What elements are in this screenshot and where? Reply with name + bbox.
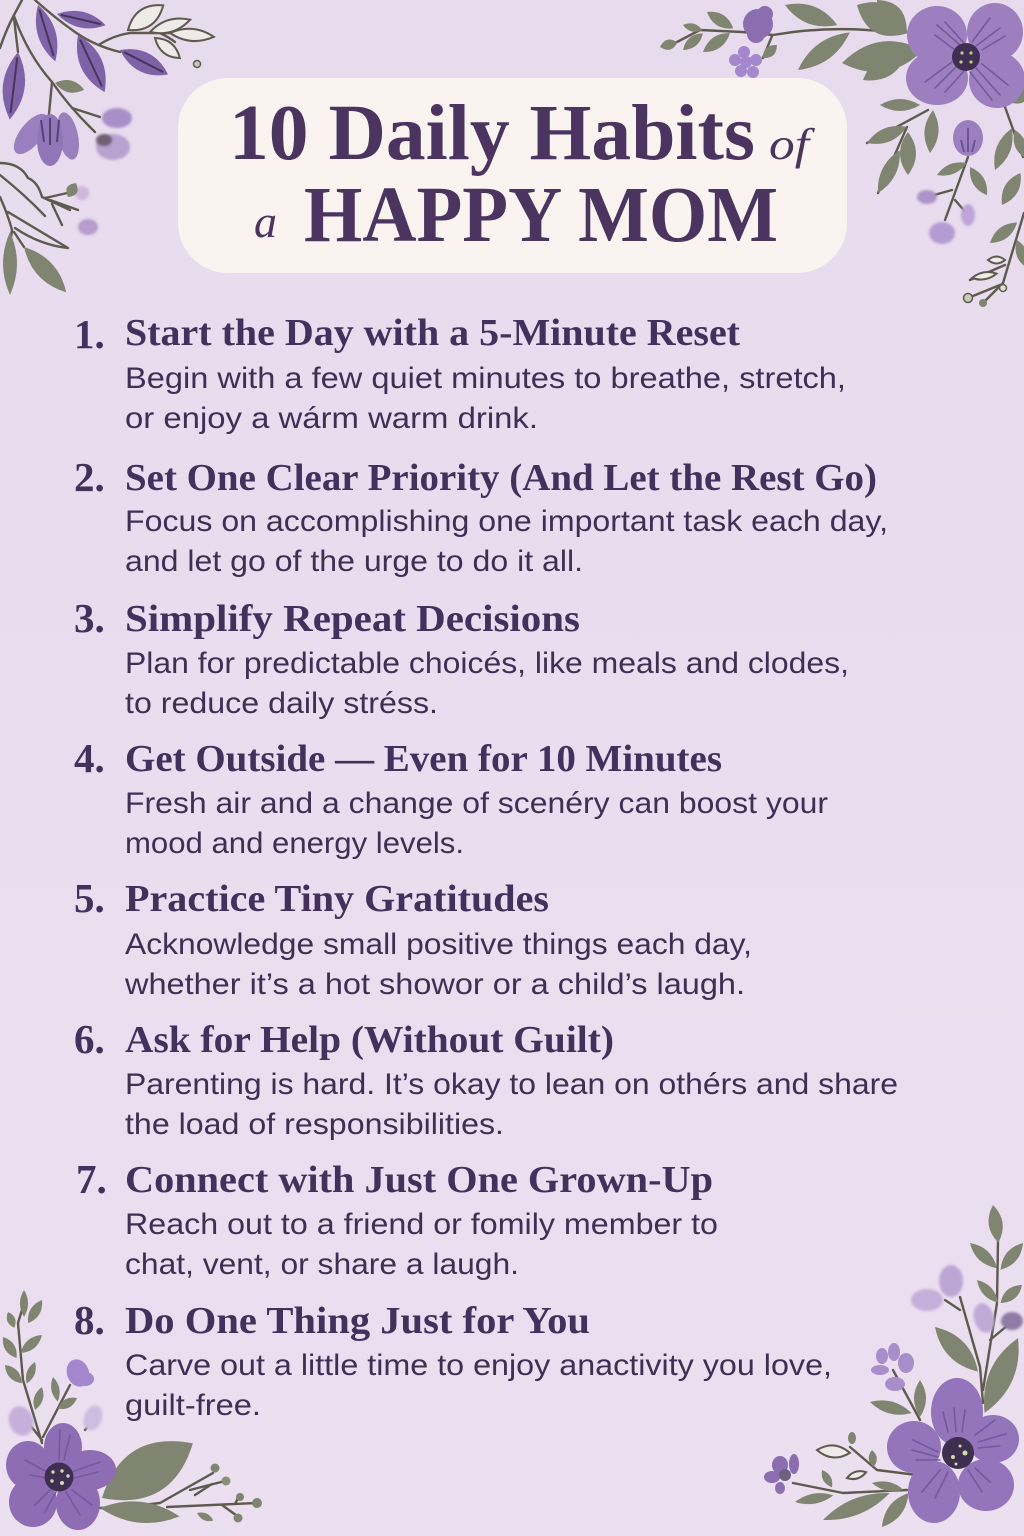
habit 1 description: or enjoy a wárm warm drink. xyxy=(125,402,538,435)
habit 5 description: Acknowledge small positive things each day, xyxy=(125,928,752,961)
habit 3: 3. xyxy=(74,595,105,641)
habit 1: 1. xyxy=(74,311,105,357)
icon: small dark flower xyxy=(764,1454,799,1494)
habit 3 description: Plan for predictable choicés, like meals and clodes, xyxy=(125,647,849,680)
habit 4 description: Fresh air and a change of scenéry can boost your xyxy=(125,787,828,820)
icon: large five-petal flower xyxy=(6,1423,116,1530)
title line 1: 10 Daily Habits xyxy=(229,90,755,177)
icon: small flower xyxy=(871,1343,914,1391)
habit 5 heading: Practice Tiny Gratitudes xyxy=(125,878,549,920)
habit 5 xyxy=(74,875,752,1001)
habit 5: 5. xyxy=(74,875,105,921)
habit 1 heading: Start the Day with a 5-Minute Reset xyxy=(125,312,740,354)
title word: of: of xyxy=(769,120,816,169)
floral corner: bottom right xyxy=(764,1204,1024,1531)
floral corner: bottom left xyxy=(0,1290,262,1530)
floral corner: top left xyxy=(0,0,214,298)
habit 5 description: whether it’s a hot showor or a child’s laugh. xyxy=(124,968,745,1001)
habit 4: 4. xyxy=(74,735,105,781)
title line 2: HAPPY MOM xyxy=(304,172,778,259)
habit 1 description: Begin with a few quiet minutes to breathe, stretch, xyxy=(125,362,846,395)
habit 1 xyxy=(74,311,846,435)
habit 7 description: Reach out to a friend or fomily member to xyxy=(125,1208,718,1241)
habit 8 xyxy=(74,1297,832,1422)
floral corner: top right xyxy=(659,0,1024,307)
habit 7: 7. xyxy=(76,1156,107,1202)
habit 4 description: mood and energy levels. xyxy=(125,827,464,860)
habit 6 description: Parenting is hard. It’s okay to lean on othérs and share xyxy=(125,1068,898,1101)
habit 3 xyxy=(74,595,849,720)
habit 8 description: Carve out a little time to enjoy anactivity you love, xyxy=(125,1349,832,1382)
habit 8 heading: Do One Thing Just for You xyxy=(125,1300,590,1342)
habit 3 description: to reduce daily stréss. xyxy=(125,687,438,720)
habit 6 xyxy=(74,1016,898,1141)
icon: small flower xyxy=(729,46,762,78)
habit 2: 2. xyxy=(74,454,105,500)
habit 6 description: the load of responsibilities. xyxy=(125,1108,504,1141)
habit 2 description: Focus on accomplishing one important task each day, xyxy=(125,505,888,538)
habit 2 xyxy=(74,454,888,578)
habit 3 heading: Simplify Repeat Decisions xyxy=(125,598,580,640)
icon: large five-petal flower xyxy=(887,1378,1019,1523)
habit 2 heading: Set One Clear Priority (And Let the Rest Go) xyxy=(125,457,877,499)
icon: large four-petal flower xyxy=(906,3,1024,108)
habit 6: 6. xyxy=(74,1016,105,1062)
title word: a: a xyxy=(254,196,277,247)
icon: purple bloom xyxy=(743,6,773,43)
habit 6 heading: Ask for Help (Without Guilt) xyxy=(125,1019,614,1061)
habit 8: 8. xyxy=(74,1297,105,1343)
habit 8 description: guilt-free. xyxy=(125,1389,261,1422)
habit 4 xyxy=(74,735,828,860)
habit 2 description: and let go of the urge to do it all. xyxy=(125,545,583,578)
icon: tulip xyxy=(8,108,83,166)
habit 7 xyxy=(76,1156,718,1281)
habit 7 heading: Connect with Just One Grown-Up xyxy=(125,1159,713,1201)
title panel xyxy=(178,78,847,273)
icon: bud xyxy=(953,120,983,156)
habit 7 description: chat, vent, or share a laugh. xyxy=(125,1248,519,1281)
habit 4 heading: Get Outside — Even for 10 Minutes xyxy=(125,738,722,780)
